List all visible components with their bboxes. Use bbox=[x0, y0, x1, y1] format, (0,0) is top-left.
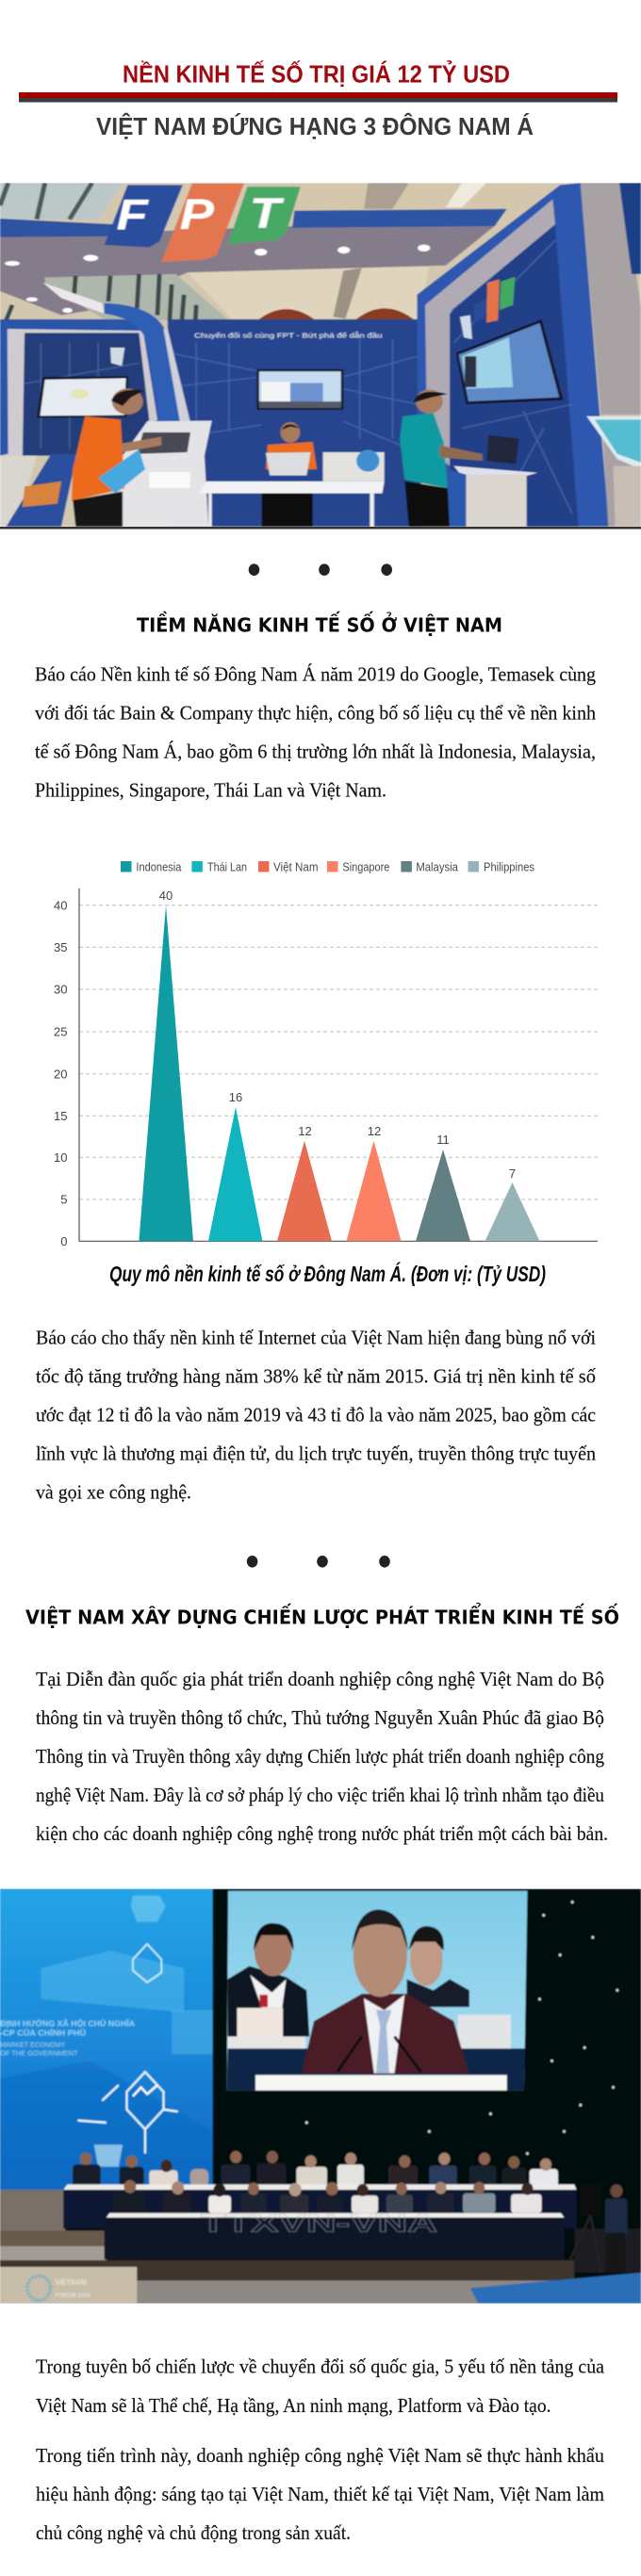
back table bbox=[63, 2184, 576, 2228]
value labels bbox=[159, 889, 516, 1181]
title rule bbox=[19, 92, 617, 102]
y axis labels: 40 bbox=[54, 899, 68, 912]
paragraph: five foundations: Trong tuyên bố chiến lược về chuyển đổi số quốc gia, 5 yếu tố nền tảng của bbox=[36, 2356, 604, 2378]
subtitle: VIỆT NAM ĐỨNG HẠNG 3 ĐÔNG NAM Á bbox=[96, 112, 534, 140]
left booth wall bbox=[0, 303, 190, 456]
paragraph: five foundations bbox=[36, 2356, 604, 2417]
screen caption: MARKET ECONOMY bbox=[0, 2042, 66, 2048]
mid left windows bbox=[7, 274, 229, 320]
value labels: 16 bbox=[229, 1090, 242, 1104]
value labels: 12 bbox=[368, 1124, 381, 1138]
legend: Malaysia bbox=[416, 861, 458, 874]
chart: digital economy size bbox=[54, 861, 598, 1248]
legend bbox=[121, 861, 534, 874]
paragraph: action slogan: Trong tiến trình này, doanh nghiệp công nghệ Việt Nam sẽ thực hành khẩu bbox=[36, 2444, 604, 2467]
paragraph: internet economy growth: ước đạt 12 tỉ đô la vào năm 2019 và 43 tỉ đô la vào năm 2025, bao gồm các bbox=[36, 1403, 596, 1426]
paragraph: report intro: Philippines, Singapore, Thái Lan và Việt Nam. bbox=[35, 779, 386, 802]
back wall bbox=[168, 319, 421, 527]
paragraph: report intro: tế số Đông Nam Á, bao gồm 6 thị trường lớn nhất là Indonesia, Malaysia, bbox=[35, 741, 596, 763]
blue beam bbox=[0, 209, 507, 237]
y axis labels: 5 bbox=[60, 1193, 68, 1207]
ceiling lights bbox=[5, 245, 430, 313]
stage floor bbox=[0, 2190, 641, 2304]
prime minister bbox=[302, 1910, 468, 2073]
back row delegates bbox=[73, 2151, 558, 2187]
y axis labels: 15 bbox=[54, 1109, 68, 1123]
right booth wall bbox=[417, 183, 641, 528]
y axis labels: 30 bbox=[54, 983, 68, 997]
front table bbox=[105, 2213, 564, 2259]
screen caption: ĐỊNH HƯỚNG XÃ HỘI CHỦ NGHĨA bbox=[0, 2019, 135, 2029]
paragraph: national forum bbox=[36, 1668, 608, 1845]
right screen bbox=[456, 319, 564, 404]
y axis labels: 10 bbox=[54, 1150, 68, 1165]
right official bbox=[407, 1926, 511, 2048]
seated man bbox=[266, 422, 317, 476]
large video screen bbox=[227, 1891, 527, 2091]
FPT logo: P bbox=[180, 190, 215, 238]
value labels: 11 bbox=[436, 1133, 450, 1147]
left official bbox=[228, 1923, 309, 2048]
stage stars bbox=[305, 1900, 618, 2155]
photo: national forum conference bbox=[0, 1889, 641, 2304]
paragraph: internet economy growth: Báo cáo cho thấy nền kinh tế Internet của Việt Nam hiện đang bùng nổ với bbox=[36, 1326, 596, 1348]
divider dots bbox=[249, 563, 392, 576]
paragraph: internet economy growth: và gọi xe công nghệ. bbox=[36, 1480, 191, 1503]
podium bbox=[448, 435, 537, 527]
paragraph: report intro bbox=[35, 663, 596, 802]
paragraph: action slogan bbox=[36, 2444, 604, 2544]
man in teal shirt bbox=[400, 389, 483, 527]
header bbox=[19, 60, 617, 140]
left screen bbox=[37, 376, 128, 418]
legend: Indonesia bbox=[136, 861, 181, 874]
paragraph: report intro: với đối tác Bain & Company thực hiện, công bố số liệu cụ thể về nền kinh bbox=[35, 702, 596, 725]
upper ceiling bbox=[364, 183, 486, 209]
centre screen bbox=[256, 369, 343, 410]
desk bbox=[198, 449, 385, 527]
paragraph: five foundations: Việt Nam sẽ là Thể chế, Hạ tầng, An ninh mạng, Platform và Đào tạo. bbox=[36, 2394, 551, 2417]
FPT logo bbox=[105, 184, 301, 262]
grey soffit bbox=[0, 224, 497, 316]
paragraph: report intro: Báo cáo Nền kinh tế số Đông Nam Á năm 2019 do Google, Temasek cùng bbox=[35, 663, 596, 686]
main title: NỀN KINH TẾ SỐ TRỊ GIÁ 12 TỶ USD bbox=[123, 60, 510, 89]
axes bbox=[79, 889, 598, 1241]
paragraph: internet economy growth: lĩnh vực là thương mại điện tử, du lịch trực tuyến, truyền thông trực tuyến bbox=[36, 1442, 596, 1464]
upper left windows bbox=[0, 183, 123, 220]
y axis labels: 35 bbox=[54, 940, 68, 954]
section heading: strategy: VIỆT NAM XÂY DỰNG CHIẾN LƯỢC PHÁT TRIỂN KINH TẾ SỐ bbox=[25, 1604, 619, 1628]
screen caption: OF THE GOVERNMENT bbox=[0, 2050, 77, 2058]
paragraph: action slogan: chủ công nghệ và chủ động trong sản xuất. bbox=[36, 2521, 351, 2544]
forum logo: FORUM 2019 bbox=[56, 2292, 90, 2299]
paragraph: internet economy growth bbox=[36, 1326, 596, 1503]
brochure stand bbox=[586, 416, 641, 527]
cameraman bbox=[570, 2184, 628, 2273]
FPT logo: F bbox=[117, 191, 149, 239]
front row delegates bbox=[112, 2180, 542, 2213]
y axis labels: 20 bbox=[54, 1067, 68, 1081]
man in orange shirt bbox=[72, 388, 161, 527]
paragraph: action slogan: hiệu hành động: sáng tạo tại Việt Nam, thiết kế tại Việt Nam, Việt Nam làm bbox=[36, 2483, 604, 2505]
value labels: 12 bbox=[298, 1124, 312, 1138]
divider dots bbox=[247, 1556, 390, 1568]
booth slogan: Chuyển đổi số cùng FPT - Bứt phá để dẫn đầu bbox=[194, 331, 383, 339]
value labels: 7 bbox=[509, 1166, 516, 1181]
photo: FPT exhibition booth bbox=[0, 183, 641, 528]
TTXVN watermark: TTXVN-VNA bbox=[200, 2209, 437, 2238]
poster stand bbox=[0, 454, 77, 527]
legend: Việt Nam bbox=[273, 861, 319, 874]
forum logo: VIETNAM bbox=[56, 2278, 87, 2287]
paragraph: internet economy growth: tốc độ tăng trưởng hàng năm 38% kể từ năm 2015. Giá trị nền kinh tế số bbox=[36, 1364, 596, 1387]
value labels: 40 bbox=[159, 889, 173, 903]
legend: Thái Lan bbox=[207, 861, 247, 874]
photo bottom edge bbox=[0, 527, 641, 530]
y axis labels bbox=[54, 899, 68, 1248]
small FPT logo bbox=[474, 277, 515, 323]
legend: Philippines bbox=[484, 861, 534, 874]
left blue screen bbox=[0, 1889, 213, 2190]
legend: Singapore bbox=[342, 861, 389, 874]
y axis labels: 0 bbox=[60, 1234, 68, 1248]
forum logo bbox=[27, 2275, 90, 2301]
kiosk bbox=[119, 421, 212, 527]
paragraph: national forum: thông tin và truyền thông tổ chức, Thủ tướng Nguyễn Xuân Phúc đã giao Bộ bbox=[36, 1706, 604, 1729]
y axis labels: 25 bbox=[54, 1025, 68, 1039]
triangle bars bbox=[139, 905, 539, 1241]
screen caption: -CP CỦA CHÍNH PHỦ bbox=[0, 2029, 86, 2038]
screen caption bbox=[0, 2019, 135, 2058]
central arched ceiling bbox=[188, 267, 429, 320]
section heading: potential: TIỀM NĂNG KINH TẾ SỐ Ở VIỆT NAM bbox=[137, 612, 502, 637]
FPT logo: T bbox=[250, 189, 285, 237]
paragraph: national forum: Tại Diễn đàn quốc gia phát triển doanh nghiệp công nghệ Việt Nam do Bộ bbox=[36, 1668, 604, 1690]
